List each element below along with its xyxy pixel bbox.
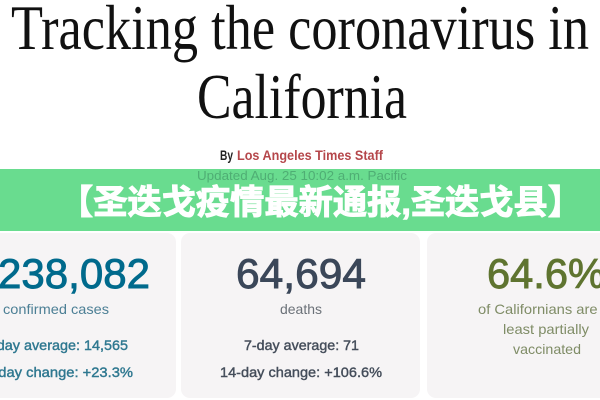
death count: 64,694 bbox=[236, 250, 366, 297]
title: California bbox=[197, 62, 407, 132]
death 14-day change: 14-day change: +106.6% bbox=[220, 364, 382, 380]
vaccination label: vaccinated bbox=[513, 341, 581, 357]
banner bbox=[0, 168, 600, 231]
panel: vaccination bbox=[427, 233, 600, 398]
panel: confirmed cases bbox=[0, 233, 176, 398]
death label: deaths bbox=[280, 301, 322, 317]
byline: Los Angeles Times Staff bbox=[237, 148, 383, 163]
death 7-day average: 7-day average: 71 bbox=[244, 337, 359, 353]
updated timestamp: Updated Aug. 25 10:02 a.m. Pacific bbox=[197, 168, 408, 183]
case count: 238,082 bbox=[0, 250, 150, 297]
byline: By bbox=[220, 148, 233, 163]
title bbox=[11, 0, 589, 132]
panel: deaths bbox=[181, 233, 420, 398]
case label: confirmed cases bbox=[3, 301, 109, 317]
vaccination label: least partially bbox=[503, 321, 589, 337]
banner headline: 【圣迭戈疫情最新通报,圣迭戈县】 bbox=[59, 184, 582, 222]
vaccination label bbox=[478, 301, 600, 357]
